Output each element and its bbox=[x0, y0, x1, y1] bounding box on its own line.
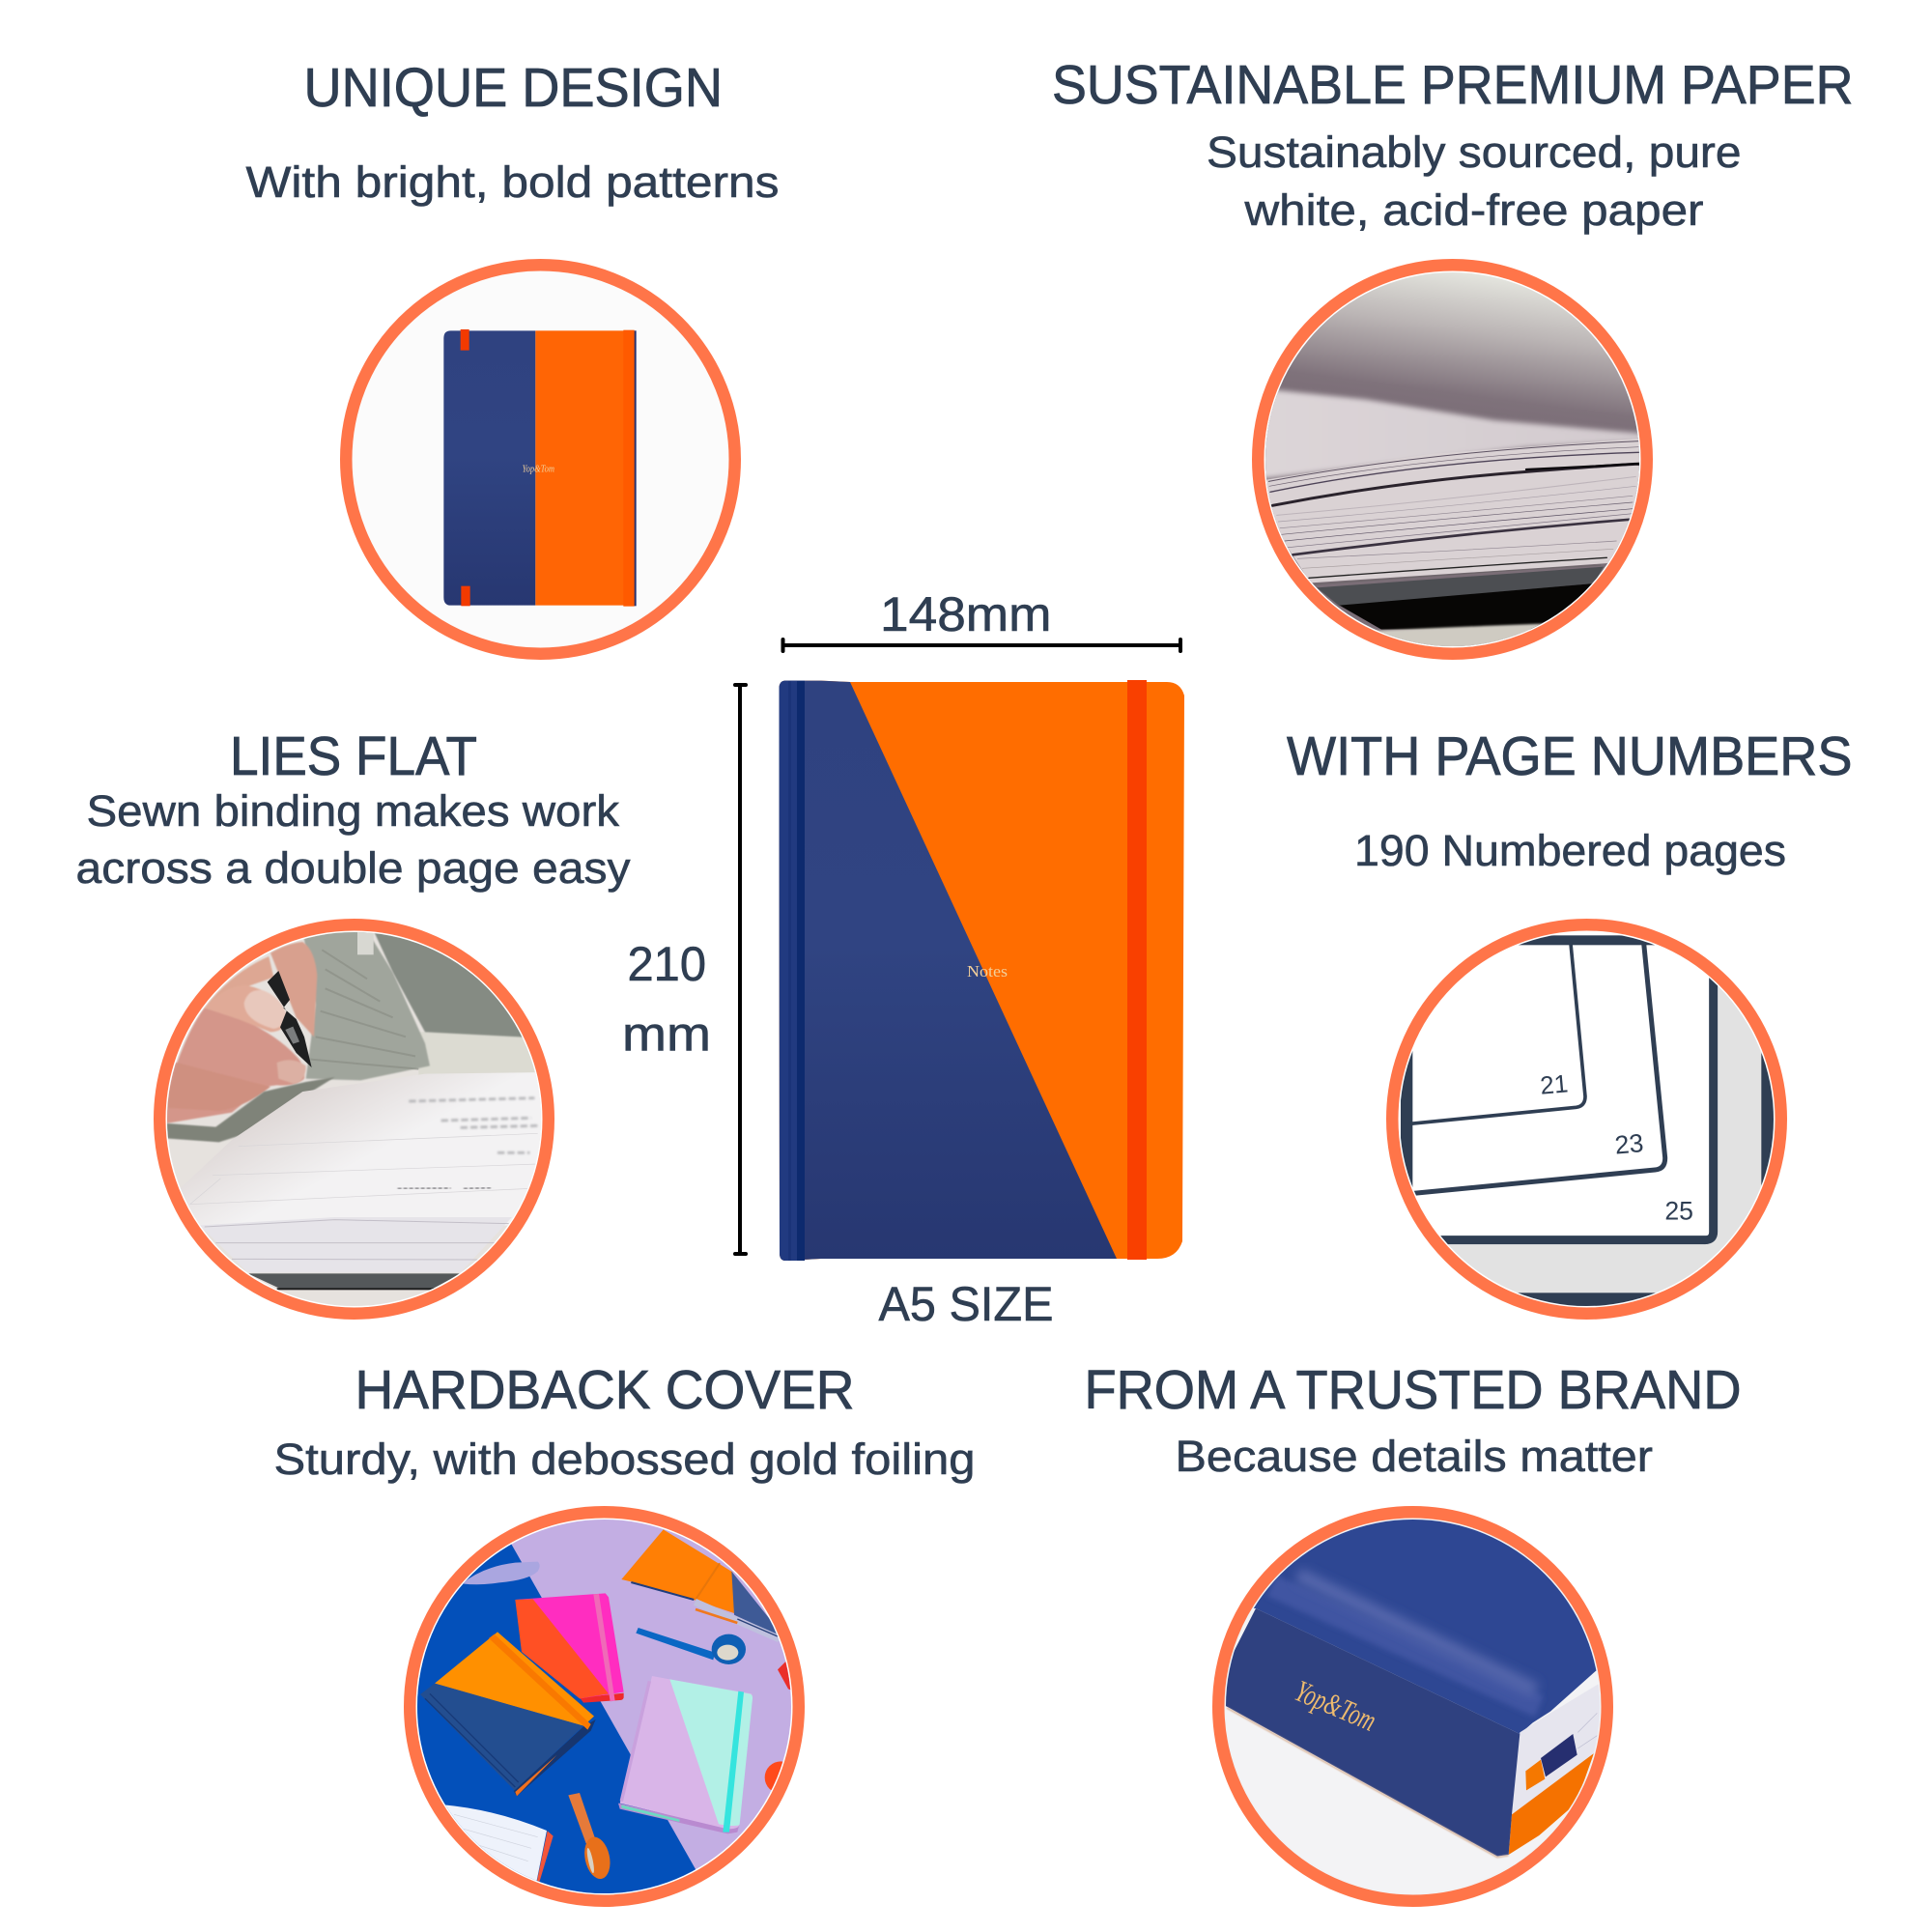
page number 23: 23 bbox=[1613, 1128, 1645, 1160]
label: 148mm: 148mm bbox=[880, 587, 1051, 641]
label: 210: 210 bbox=[628, 937, 706, 991]
page number 25: 25 bbox=[1664, 1197, 1693, 1226]
text: sewn binding line two: across a double page easy bbox=[75, 843, 631, 893]
heading: sustainable premium paper: SUSTAINABLE PREMIUM PAPER bbox=[1052, 54, 1853, 116]
pastel lilac and mint notebook bbox=[618, 1676, 753, 1833]
page stack bbox=[200, 1217, 512, 1272]
lilac eraser bbox=[462, 1562, 540, 1584]
icon: two-tone notebook back cover bbox=[443, 329, 637, 607]
text: sustainably sourced line two: white, acid-free paper bbox=[1243, 185, 1704, 235]
panel: unique design photo circle bbox=[346, 265, 735, 654]
dimension: height bracket bbox=[733, 683, 748, 1256]
elastic band bbox=[1127, 680, 1147, 1260]
page block bbox=[1512, 1681, 1604, 1814]
text: sustainably sourced line one: Sustainably sourced, pure bbox=[1207, 128, 1741, 177]
blue background wedge bbox=[417, 1544, 696, 1893]
icon: two-tone notebook back cover: Yop&Tom bbox=[523, 464, 554, 474]
text: 190 numbered pages: 190 Numbered pages bbox=[1354, 826, 1786, 875]
orange washi tape bbox=[568, 1793, 613, 1881]
notebook: front cover illustration bbox=[779, 680, 1184, 1261]
cover title: Notes bbox=[967, 962, 1008, 980]
text: because details matter: Because details matter bbox=[1175, 1432, 1653, 1481]
heading: from a trusted brand: FROM A TRUSTED BRAND bbox=[1084, 1359, 1741, 1421]
white open notebook bbox=[444, 1804, 554, 1884]
top page surface bbox=[1256, 388, 1649, 478]
dimension: width bracket bbox=[781, 638, 1182, 653]
dark cover edge bbox=[248, 1273, 461, 1289]
orange and navy notebook bbox=[420, 1632, 596, 1796]
dark cover band bbox=[1317, 567, 1604, 606]
orange endpaper bbox=[1509, 1753, 1594, 1855]
crease highlight bbox=[1272, 1586, 1539, 1707]
grey sweater bbox=[374, 933, 522, 1037]
top right orange notebook bbox=[621, 1529, 785, 1639]
panel: premium paper photo circle bbox=[1256, 264, 1652, 660]
text: sewn binding line one: Sewn binding makes work bbox=[87, 786, 620, 836]
stack of page edges bbox=[1263, 438, 1649, 582]
red accents bbox=[778, 1662, 790, 1690]
text: with bright, bold patterns: With bright, bold patterns bbox=[245, 157, 779, 207]
text: sturdy with debossed gold foiling: Sturdy, with debossed gold foiling bbox=[274, 1435, 975, 1484]
panel: trusted brand photo circle bbox=[1210, 1507, 1616, 1913]
heading: hardback cover: HARDBACK COVER bbox=[355, 1359, 854, 1421]
panel: hardback cover photo circle bbox=[399, 1507, 805, 1913]
panel: lies flat photo circle bbox=[155, 921, 554, 1321]
brand foil text: Yop&Tom bbox=[1291, 1674, 1381, 1738]
panel: page numbers circle bbox=[1381, 908, 1800, 1326]
heading: unique design: UNIQUE DESIGN bbox=[303, 57, 723, 119]
pen bbox=[268, 971, 312, 1067]
open notebook page bbox=[181, 1072, 551, 1227]
spine bbox=[1210, 1608, 1520, 1857]
heading: with page numbers: WITH PAGE NUMBERS bbox=[1287, 725, 1853, 787]
label: a5 size: A5 SIZE bbox=[879, 1277, 1053, 1331]
top cover bbox=[1254, 1520, 1596, 1734]
page 25 outline bbox=[1420, 963, 1714, 1240]
spine bbox=[779, 681, 805, 1261]
ribbon markers bbox=[1525, 1734, 1577, 1790]
page number 21: 21 bbox=[1539, 1068, 1569, 1100]
heading: lies flat: LIES FLAT bbox=[230, 725, 477, 787]
hand and fingers bbox=[164, 942, 317, 1123]
lower sweater cuff bbox=[164, 1077, 335, 1142]
blue washi tape bbox=[636, 1628, 746, 1664]
grey notebook cover and frame bbox=[1449, 986, 1762, 1293]
pink and red notebook bbox=[515, 1593, 624, 1703]
label: mm: mm bbox=[622, 1007, 711, 1061]
page 23 outline bbox=[1401, 944, 1665, 1195]
page 21 outline bbox=[1410, 944, 1585, 1123]
